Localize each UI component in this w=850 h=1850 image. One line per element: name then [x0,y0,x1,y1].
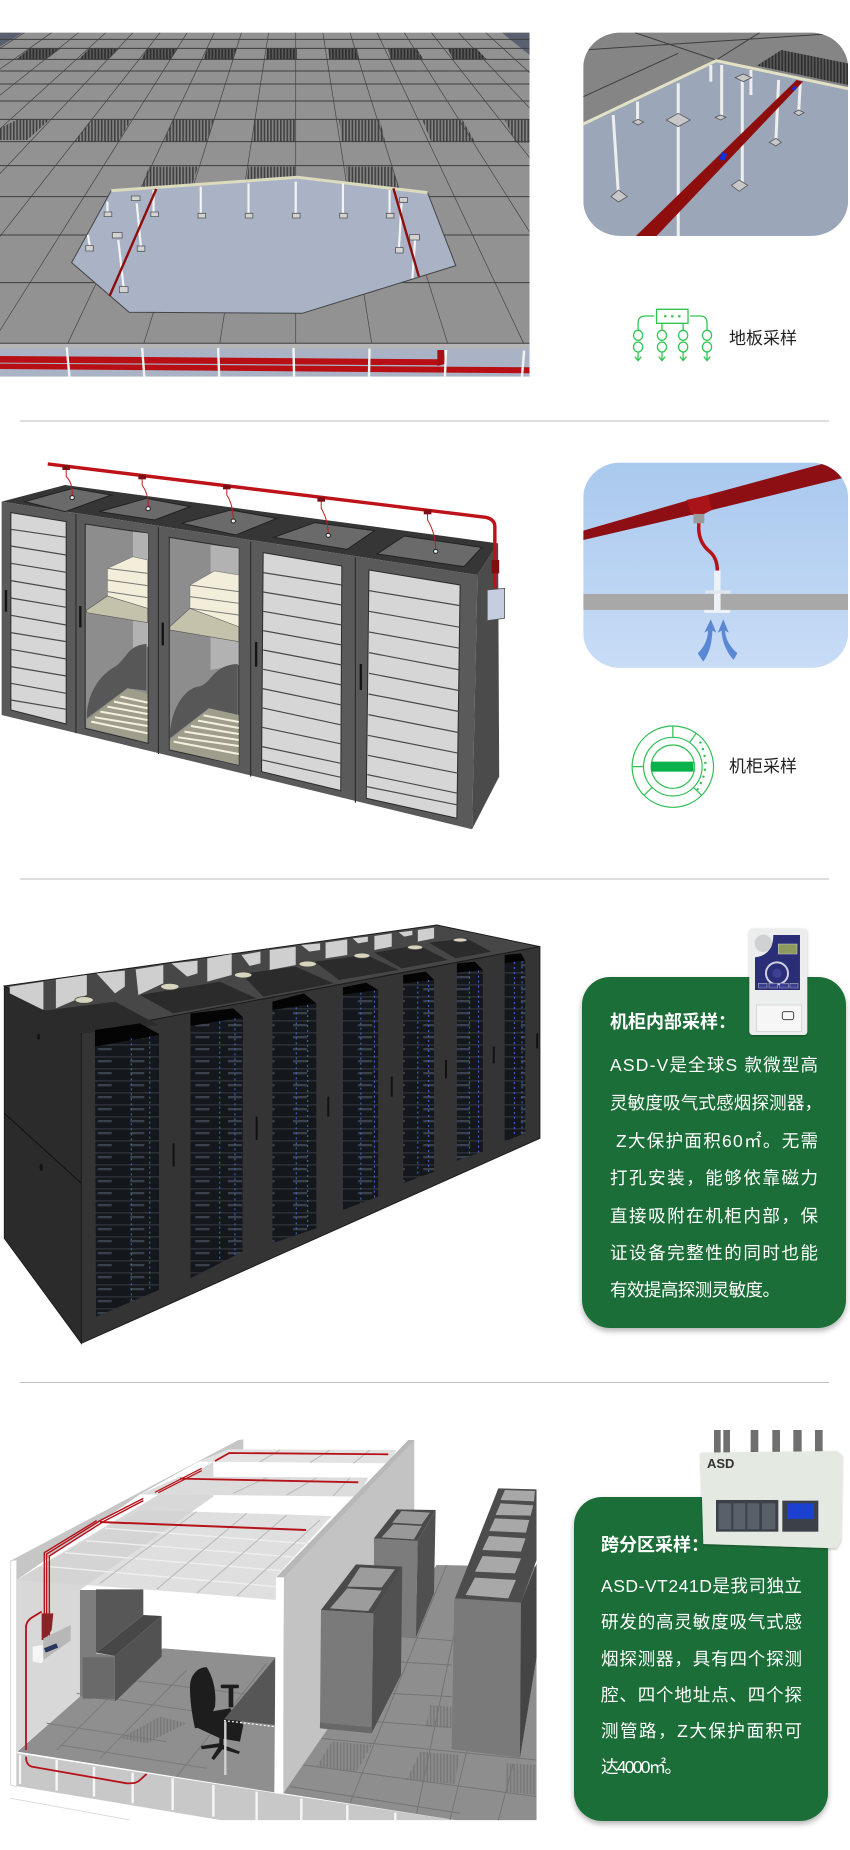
cabinet roof panels [24,488,482,567]
panel: floor sampling scene [0,32,530,377]
body text: 灵敏度吸气式感烟探测器， [610,1093,822,1113]
detector on cabinet side [487,588,505,621]
body text: ASD-V是全球S 款微型高 [610,1055,818,1075]
partition wall [283,1440,414,1793]
panel: cabinet sampling close-up inset [583,463,848,668]
rack group C [452,1488,537,1758]
body text: 有效提高探测灵敏度。 [610,1280,780,1300]
panel: cabinet sampling scene [2,464,505,829]
server racks [95,961,525,1317]
cabinet door 1 [11,513,66,724]
room floor [17,1648,276,1793]
icon: floor sampling pipe network [633,309,712,361]
body text: 研发的高灵敏度吸气式感 [601,1612,802,1632]
under-floor sampling pipes [0,347,530,377]
device: ASD-VT241D detector: ASD [707,1456,734,1471]
body text: Z大保护面积60㎡。无需 [616,1131,818,1151]
icon: cabinet sampling ring [632,726,714,807]
card: cross-zone sampling [574,1497,828,1821]
ceiling sampling pipes [26,1453,388,1783]
translucent ceiling grid [17,1449,397,1600]
device: ASD-VT241D detector [701,1430,842,1548]
panel: cross-zone sampling scene [11,1439,537,1820]
office chair [190,1667,243,1760]
panel: in-cabinet sampling scene [4,925,540,1343]
body text: 测管路，Z大保护面积可 [601,1721,802,1741]
server units [80,1589,162,1702]
body text: 直接吸附在机柜内部，保 [610,1206,818,1226]
left wall post [11,1560,17,1787]
left wall [11,1439,243,1752]
divider [20,1382,829,1383]
panel: floor sampling close-up inset [583,33,848,236]
cabinet door 2: open rack [85,524,148,743]
body text: 烟探测器，具有四个探测 [601,1649,802,1669]
under-floor void [11,1753,457,1820]
cabinet door 4 [262,553,342,791]
rack group B [374,1509,436,1637]
heading: 机柜内部采样： [610,1011,736,1032]
label: cabinet sampling: 机柜采样 [729,757,797,776]
partition front post [274,1577,284,1793]
body text: 腔、四个地址点、四个探 [601,1685,802,1705]
body text: 打孔安装，能够依靠磁力 [610,1168,818,1188]
divider [20,878,829,880]
red sampling pipe [48,464,499,588]
wall-mounted detector [33,1613,71,1663]
desk [224,1658,275,1775]
body text [610,1055,822,1300]
card: in-cabinet sampling [582,977,846,1328]
cabinet top openings [10,928,434,1010]
body text: 达4000㎡。 [601,1757,682,1777]
divider [20,420,829,422]
label: floor sampling: 地板采样 [729,329,797,348]
cabinet door 5 [366,570,460,818]
rooftop detectors [75,938,467,1003]
device: ASD-V detector [749,928,807,1035]
body text: ASD-VT241D是我司独立 [601,1576,802,1596]
cabinet door 3: open rack [169,537,239,765]
partition, right room and racks [274,1440,537,1820]
body text [601,1576,802,1777]
floor opening [72,177,456,313]
heading: 跨分区采样： [601,1535,709,1555]
body text: 证设备完整性的同时也能 [610,1243,818,1263]
rack group A [320,1564,402,1733]
arrows: air intake [698,619,737,662]
right room floor [283,1565,537,1820]
